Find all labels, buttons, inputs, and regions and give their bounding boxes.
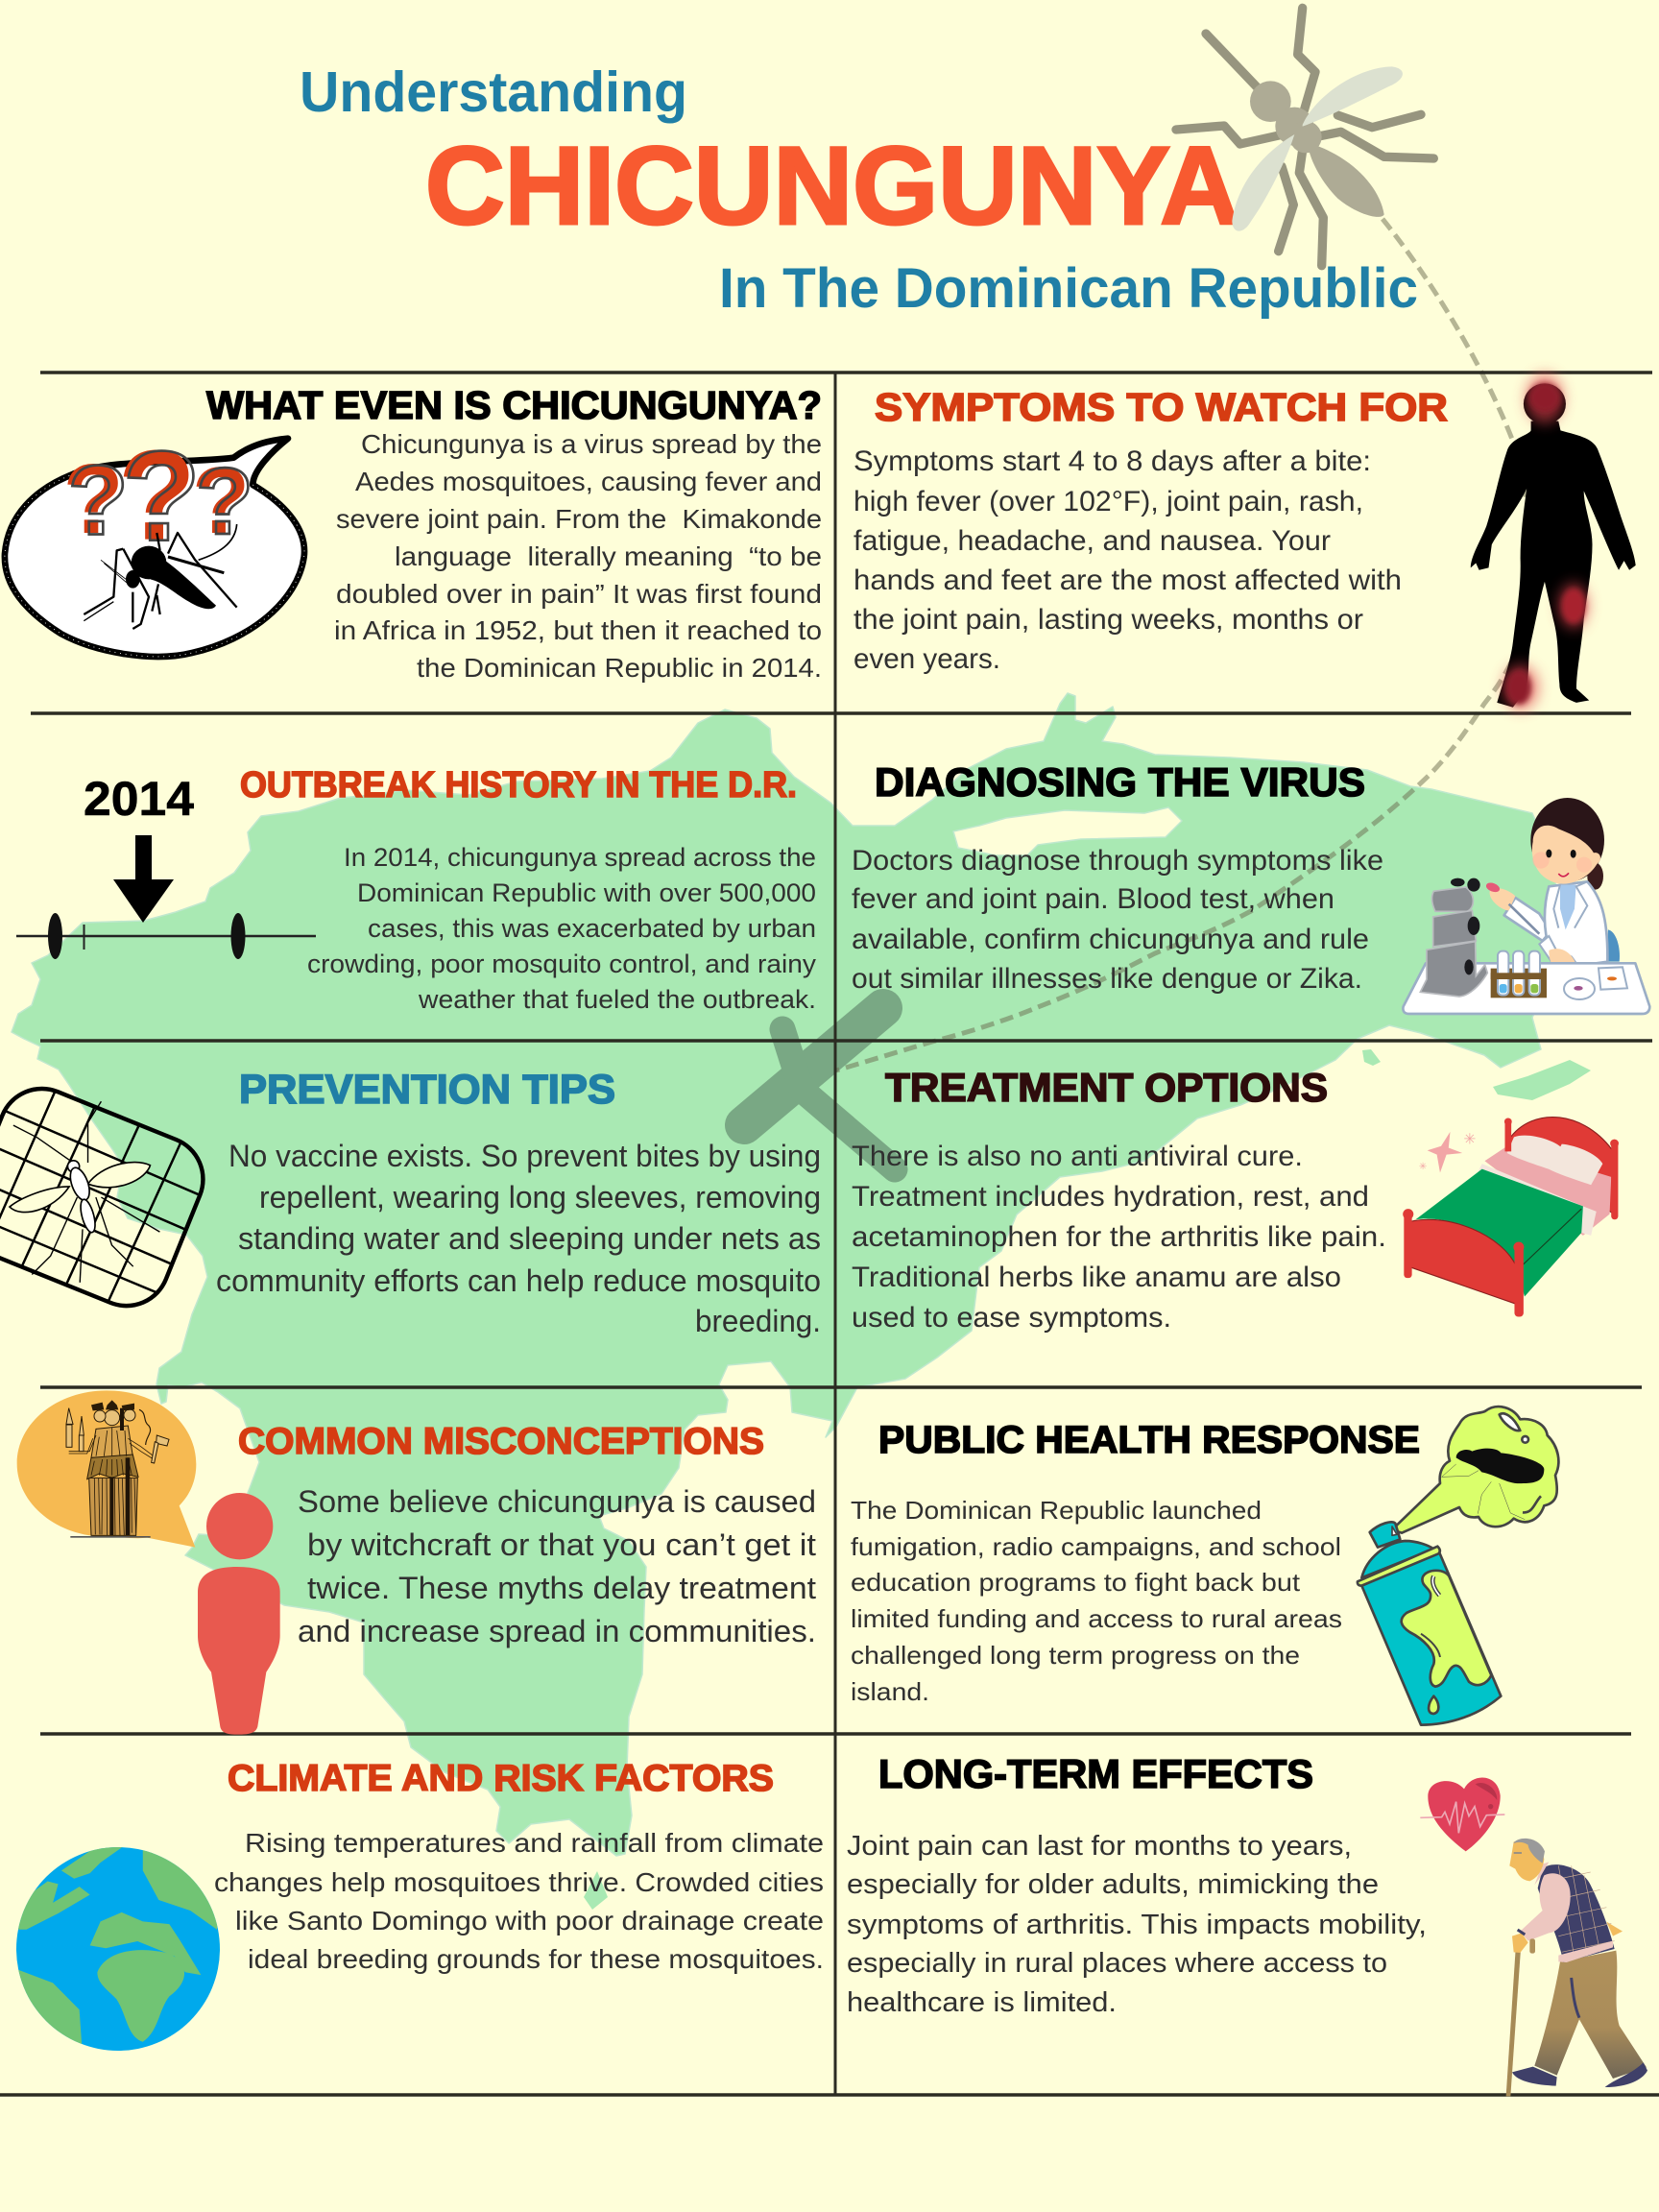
body text: twice. These myths delay treatment (307, 1571, 816, 1605)
body text (214, 1828, 824, 1974)
icon: speech bubble with mosquito and question marks (5, 424, 304, 657)
body text: acetaminophen for the arthritis like pain. (852, 1221, 1386, 1253)
body text: crowding, poor mosquito control, and rainy (307, 950, 817, 978)
body text: high fever (over 102°F), joint pain, rash, (854, 486, 1363, 517)
body text: Treatment includes hydration, rest, and (852, 1181, 1369, 1213)
body text (852, 845, 1383, 995)
body text: changes help mosquitoes thrive. Crowded cities (214, 1867, 824, 1897)
body text (307, 843, 817, 1014)
heading: PUBLIC HEALTH RESPONSE (878, 1419, 1420, 1461)
body text: available, confirm chicungunya and rule (852, 924, 1369, 955)
subtitle: In The Dominican Republic: In The Dominican Republic (719, 257, 1418, 320)
panel: climate and risk factors (11, 1758, 824, 2056)
icon: speech bubble with mosquito and question marks: ? (68, 445, 129, 556)
icon: heart and elderly man (1420, 1778, 1647, 2096)
body text: especially in rural places where access to (847, 1948, 1387, 1979)
body text (216, 1139, 821, 1338)
can body (1370, 1522, 1400, 1548)
body text: weather that fueled the outbreak. (418, 985, 816, 1014)
arrow pointing down (113, 835, 174, 923)
body text (852, 1141, 1386, 1334)
map of the Dominican Republic (12, 693, 1591, 1910)
icon: large mosquito (1176, 8, 1433, 266)
body text: community efforts can help reduce mosquito (216, 1263, 821, 1298)
body text: ideal breeding grounds for these mosquitoes. (248, 1944, 824, 1974)
body text: especially for older adults, mimicking the (847, 1869, 1379, 1900)
body text: and increase spread in communities. (298, 1614, 816, 1648)
body text: There is also no anti antiviral cure. (852, 1141, 1303, 1172)
body text: Chicungunya is a virus spread by the (361, 429, 822, 459)
dashed flight path arrow (836, 219, 1530, 1070)
icon: speech bubble with mosquito and question marks: ? (192, 447, 250, 553)
body text: In 2014, chicungunya spread across the (344, 843, 816, 872)
speech bubble (17, 1390, 196, 1548)
elderly man with cane (1506, 1839, 1647, 2096)
year label: 2014 (84, 772, 194, 826)
panel: outbreak history (16, 765, 817, 1014)
spray cloud (1392, 1407, 1558, 1533)
body text: breeding. (695, 1304, 821, 1338)
icon: doctor at microscope (1403, 798, 1649, 1014)
heading: DIAGNOSING THE VIRUS (875, 759, 1365, 805)
icon: bed: ✳ (1419, 1162, 1427, 1172)
body text: limited funding and access to rural areas (851, 1604, 1342, 1633)
heading: COMMON MISCONCEPTIONS (238, 1421, 764, 1462)
body text: Symptoms start 4 to 8 days after a bite: (854, 445, 1371, 477)
panel: public health response (851, 1407, 1558, 1725)
panel: long-term effects (847, 1751, 1647, 2096)
icon: speech bubble with mosquito and question marks: ? (63, 443, 124, 554)
body text: fever and joint pain. Blood test, when (852, 883, 1334, 915)
x mark on the map (744, 1008, 895, 1169)
heading: LONG-TERM EFFECTS (878, 1751, 1313, 1796)
timeline chart with 2014 marker (16, 772, 316, 959)
heading: OUTBREAK HISTORY IN THE D.R. (240, 765, 797, 805)
body text: fumigation, radio campaigns, and school (851, 1532, 1341, 1561)
body text: Traditional herbs like anamu are also (852, 1262, 1341, 1293)
title block (300, 60, 1418, 320)
body text: Dominican Republic with over 500,000 (357, 878, 816, 907)
body text: fatigue, headache, and nausea. Your (854, 525, 1331, 557)
body text: No vaccine exists. So prevent bites by using (228, 1139, 821, 1173)
icon: speech bubble with mosquito and question marks: ? (196, 448, 253, 554)
icon: human silhouette with pain points (1471, 373, 1636, 710)
panel: treatment options (852, 1065, 1619, 1334)
heading: WHAT EVEN IS CHICUNGUNYA? (206, 383, 822, 427)
title line: Understanding: Understanding (300, 60, 687, 124)
body text: by witchcraft or that you can’t get it (307, 1527, 816, 1562)
panel: common misconceptions (17, 1390, 816, 1735)
body text: hands and feet are the most affected with (854, 565, 1402, 596)
figure: three-faced statue (66, 1400, 169, 1538)
body text: even years. (854, 643, 1000, 675)
body text: the Dominican Republic in 2014. (417, 653, 822, 683)
icon: spray can with mosquito (1358, 1407, 1558, 1725)
heart with pulse line (1420, 1778, 1504, 1851)
body text (847, 1831, 1427, 2018)
icon: mosquito in net (0, 1087, 205, 1308)
body text: education programs to fight back but (851, 1568, 1301, 1597)
figure: red person (198, 1493, 280, 1735)
body text: the joint pain, lasting weeks, months or (854, 604, 1363, 636)
heading: SYMPTOMS TO WATCH FOR (875, 385, 1448, 429)
panel: prevention tips (0, 1067, 821, 1338)
panel: diagnosing the virus (852, 759, 1649, 1014)
body text: The Dominican Republic launched (851, 1496, 1262, 1525)
body text: language literally meaning “to be (395, 541, 822, 571)
title: CHICUNGUNYA: CHICUNGUNYA (425, 125, 1239, 248)
icon: earth globe (11, 1844, 228, 2056)
body text: symptoms of arthritis. This impacts mobility, (847, 1910, 1427, 1940)
body text (334, 429, 822, 683)
icon: bed (1403, 1118, 1619, 1317)
panel: symptoms to watch for (854, 373, 1636, 710)
body text: used to ease symptoms. (852, 1302, 1171, 1334)
body text: Doctors diagnose through symptoms like (852, 845, 1383, 877)
body text: Some believe chicungunya is caused (298, 1484, 816, 1519)
panel: what even is chicungunya (5, 383, 822, 683)
icon: speech bubble with mosquito and question marks: ? (123, 425, 201, 568)
icon: speech bubble with mosquito and question marks: ? (118, 424, 196, 567)
body text: repellent, wearing long sleeves, removing (259, 1180, 821, 1214)
body text: in Africa in 1952, but then it reached to (334, 615, 822, 645)
body text: healthcare is limited. (847, 1987, 1117, 2018)
icon: person with thought bubble (17, 1390, 280, 1735)
body text: Aedes mosquitoes, causing fever and (355, 467, 822, 496)
body text: cases, this was exacerbated by urban (368, 914, 816, 943)
heading: TREATMENT OPTIONS (885, 1065, 1328, 1110)
body text: island. (851, 1677, 929, 1706)
body text: standing water and sleeping under nets as (238, 1221, 821, 1256)
body text (298, 1484, 816, 1648)
body text: Rising temperatures and rainfall from climate (245, 1828, 824, 1858)
body text: severe joint pain. From the Kimakonde (336, 504, 822, 534)
body text: doubled over in pain” It was first found (336, 579, 822, 609)
body text: like Santo Domingo with poor drainage create (235, 1906, 824, 1936)
heading: PREVENTION TIPS (239, 1067, 615, 1113)
body text: challenged long term progress on the (851, 1641, 1300, 1670)
body text: Joint pain can last for months to years, (847, 1831, 1352, 1862)
icon: bed: ✳ (1463, 1132, 1476, 1148)
body text: out similar illnesses like dengue or Zika. (852, 963, 1362, 995)
heading: CLIMATE AND RISK FACTORS (228, 1758, 774, 1799)
body text (854, 445, 1402, 675)
body text (851, 1496, 1342, 1706)
